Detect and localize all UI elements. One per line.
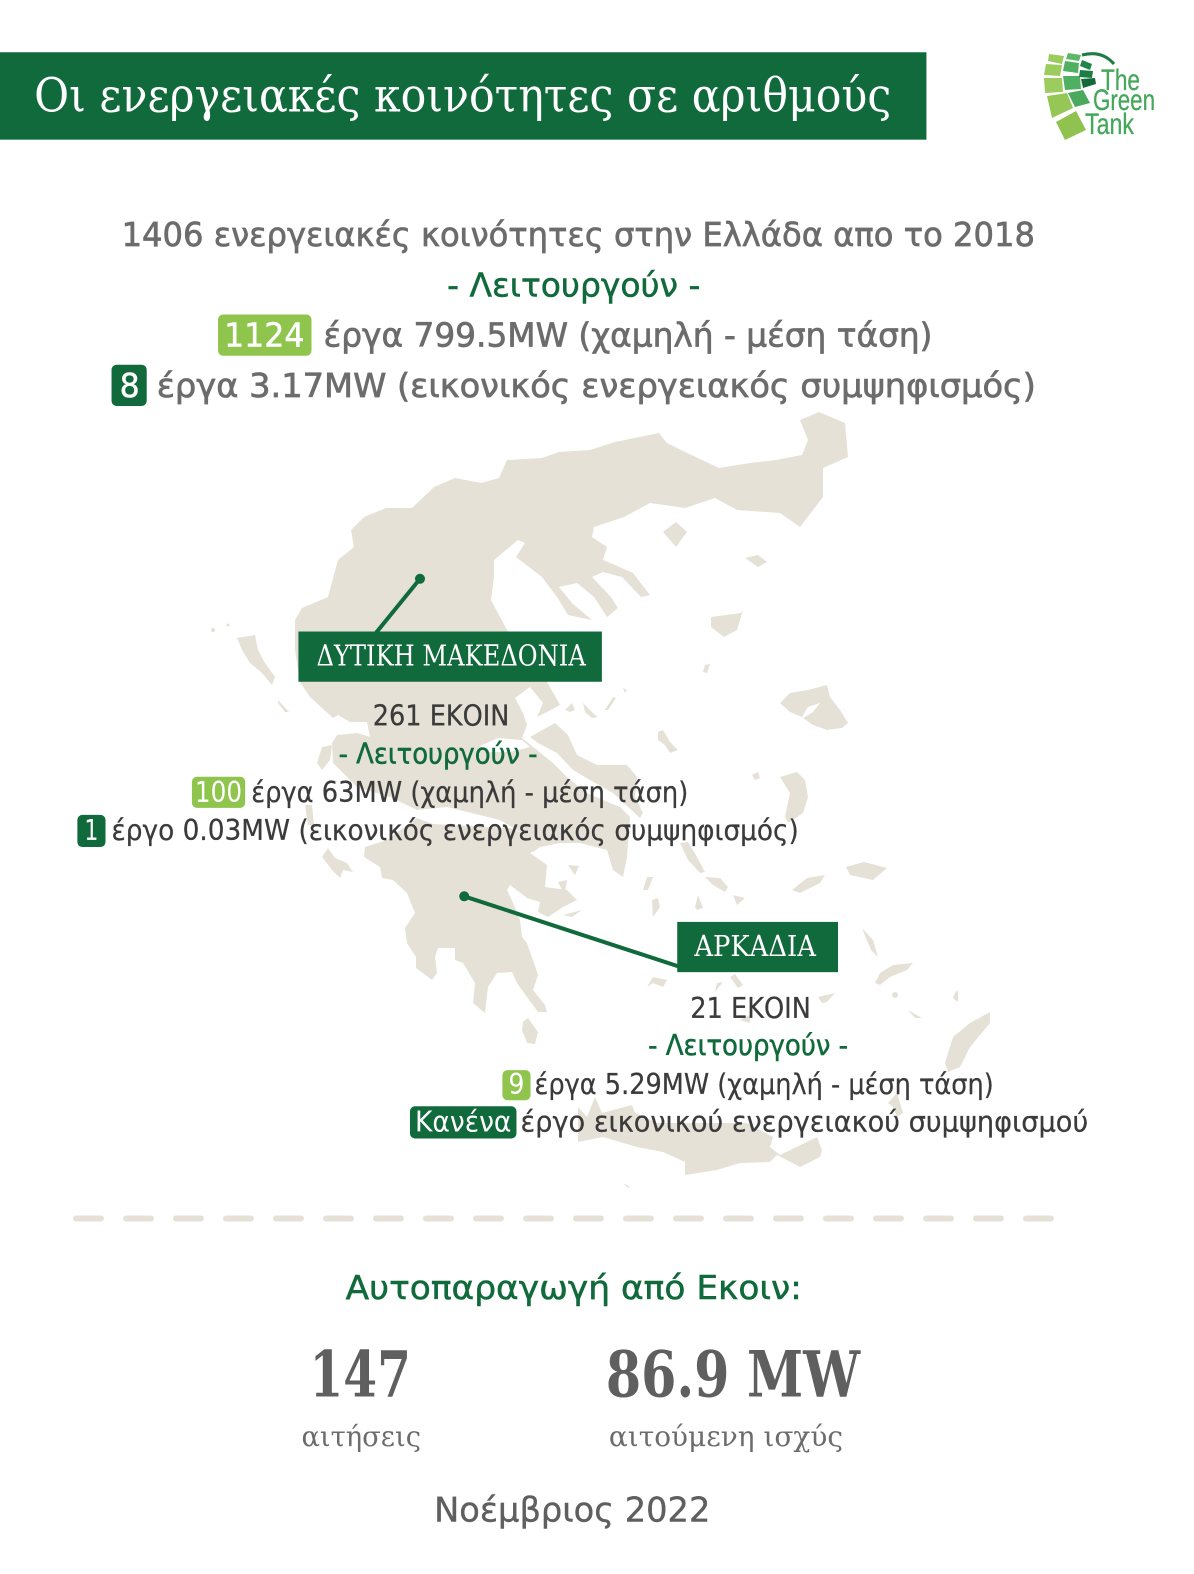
logo: The Green Tank <box>1044 53 1155 141</box>
date: Νοέμβριος 2022 <box>434 1490 710 1530</box>
heading: national summary: - Λειτουργούν - <box>447 265 700 304</box>
label: Western Macedonia: ΔΥΤΙΚΗ ΜΑΚΕΔΟΝΙΑ <box>317 639 587 673</box>
stats: Arcadia: έργα 5.29MW (χαμηλή - μέση τάση) <box>535 1068 994 1101</box>
stats: Arcadia: 21 ΕΚΟΙΝ <box>690 992 811 1025</box>
stats: Arcadia: έργο εικονικού ενεργειακού συμψηφισμού <box>520 1105 1088 1138</box>
label: Arcadia <box>677 922 838 972</box>
heading: national summary: 1406 ενεργειακές κοινότητες στην Ελλάδα απο το 2018 <box>122 215 1035 254</box>
heading: national summary: 1124 <box>224 316 304 355</box>
callout: Arcadia pointer <box>459 891 679 967</box>
stats: Western Macedonia: 100 <box>195 776 242 809</box>
title banner <box>0 52 926 140</box>
heading: self-production: Αυτοπαραγωγή από Εκοιν: <box>346 1268 802 1307</box>
stat: applications: αιτήσεις <box>301 1420 421 1453</box>
stats: Western Macedonia <box>77 699 799 847</box>
heading: national summary: 8 <box>120 366 140 405</box>
title banner: Οι ενεργειακές κοινότητες σε αριθμούς <box>34 69 891 124</box>
logo: The Green Tank: Tank <box>1085 108 1135 141</box>
stats: Arcadia: Κανένα <box>415 1105 511 1138</box>
stat: requested capacity <box>606 1338 861 1453</box>
stats: Western Macedonia: - Λειτουργούν - <box>339 738 538 771</box>
stat: requested capacity: αιτούμενη ισχύς <box>609 1420 843 1453</box>
stat: applications <box>301 1338 421 1453</box>
stats: Western Macedonia: 261 ΕΚΟΙΝ <box>373 699 509 732</box>
heading: national summary: έργα 3.17MW (εικονικός ενεργειακός συμψηφισμός) <box>157 366 1036 405</box>
stats: Western Macedonia: έργο 0.03MW (εικονικός ενεργειακός συμψηφισμός) <box>112 814 799 847</box>
map of Greece <box>211 412 990 1188</box>
heading: national summary: έργα 799.5MW (χαμηλή - μέση τάση) <box>324 316 932 355</box>
stats: Arcadia <box>410 992 1088 1138</box>
stats: Western Macedonia: έργα 63MW (χαμηλή - μέση τάση) <box>251 776 688 809</box>
stat: applications: 147 <box>309 1338 411 1412</box>
logo: The Green Tank: Green <box>1093 84 1155 117</box>
heading: national summary <box>112 215 1036 406</box>
stat: requested capacity: 86.9 MW <box>606 1338 861 1412</box>
label: Western Macedonia <box>298 632 602 682</box>
stats: Western Macedonia: 1 <box>84 814 98 847</box>
label: Arcadia: ΑΡΚΑΔΙΑ <box>693 929 817 963</box>
logo: The Green Tank: The <box>1101 64 1140 97</box>
stats: Arcadia: - Λειτουργούν - <box>648 1029 848 1062</box>
stats: Arcadia: 9 <box>508 1068 525 1101</box>
callout: Western Macedonia pointer <box>376 574 425 633</box>
